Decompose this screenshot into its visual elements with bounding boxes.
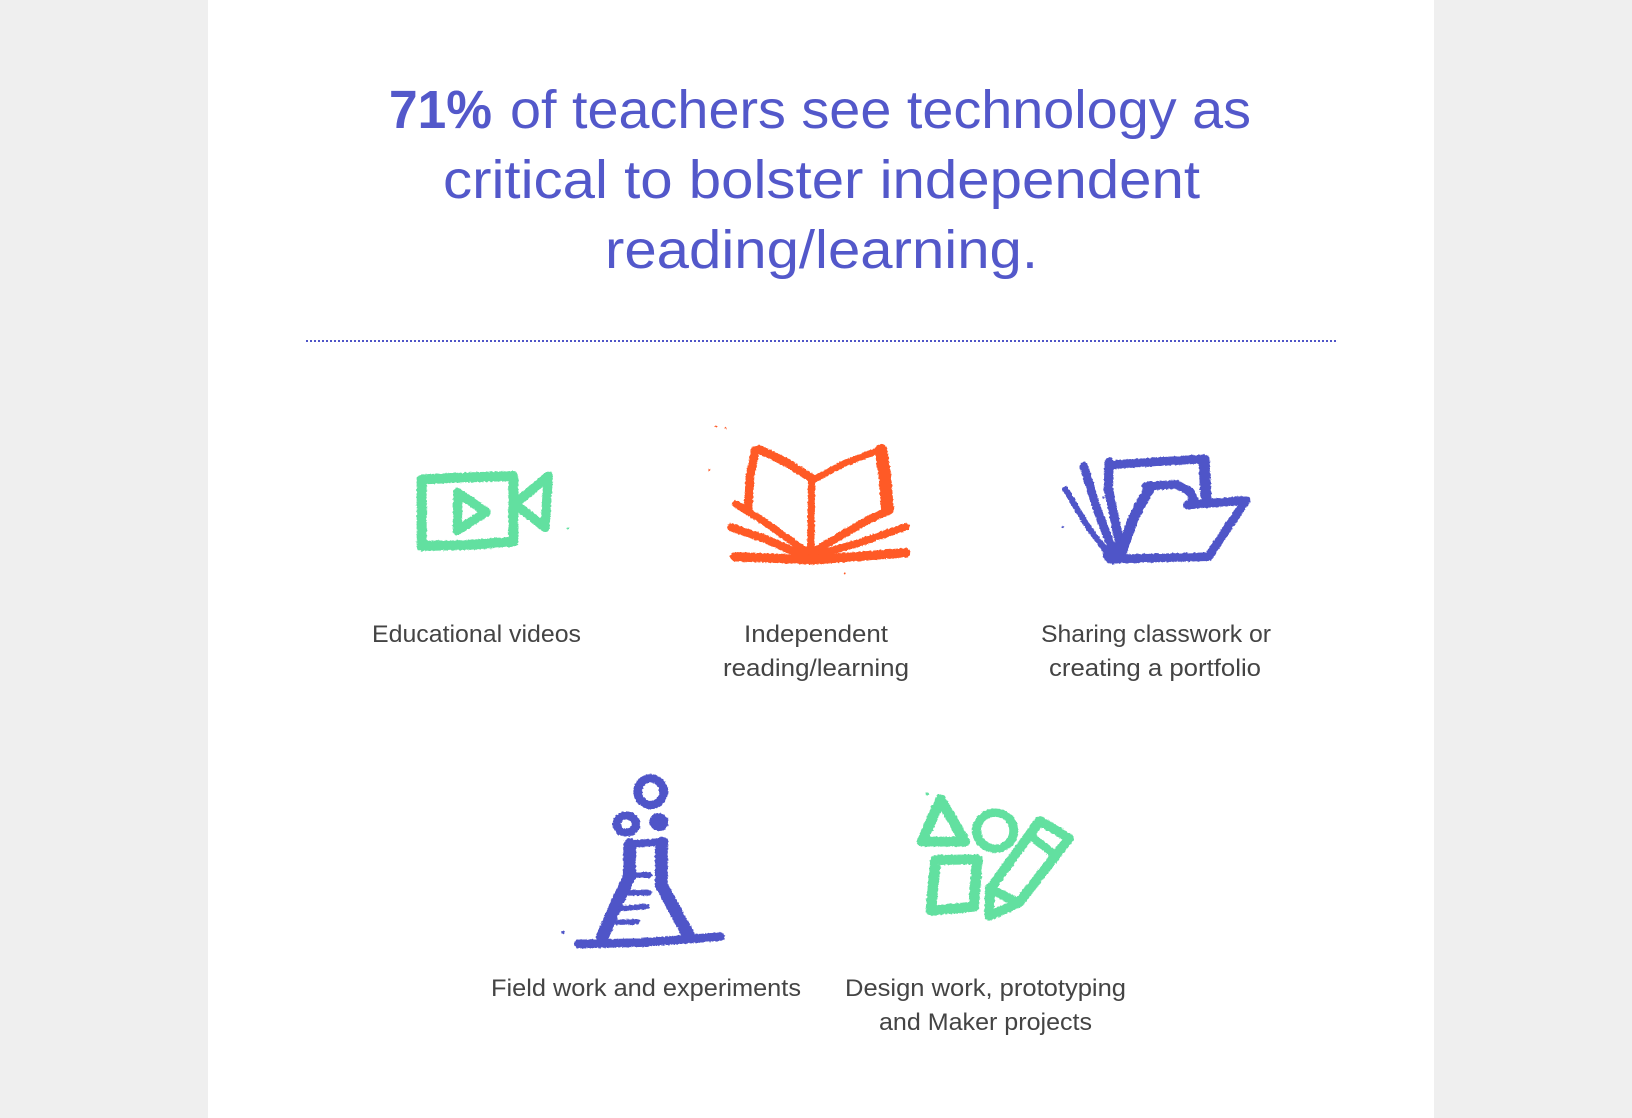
icon: video camera	[422, 476, 568, 546]
label: independent reading/learning	[723, 621, 909, 682]
label: design work: and Maker projects	[879, 1009, 1092, 1036]
label: independent reading/learning: Independent	[744, 621, 888, 648]
label: independent reading/learning: reading/learning	[723, 655, 909, 682]
label: sharing classwork: Sharing classwork or	[1041, 621, 1271, 648]
label: sharing classwork	[1041, 621, 1271, 682]
label: educational videos: Educational videos	[372, 621, 581, 648]
title: 71%	[389, 80, 492, 140]
title: reading/learning.	[605, 220, 1038, 280]
title	[389, 80, 1251, 280]
label: design work: Design work, prototyping	[845, 975, 1126, 1002]
icon: open book	[709, 426, 906, 574]
label: field work: Field work and experiments	[491, 975, 801, 1002]
title: of teachers see technology as	[510, 80, 1251, 140]
icon: folder	[1062, 459, 1246, 559]
label: design work	[845, 975, 1126, 1036]
title: critical to bolster independent	[443, 150, 1200, 210]
icon: shapes and pencil	[922, 793, 1069, 916]
panel: white card	[208, 0, 1434, 1118]
icon: flask with bubbles	[562, 778, 720, 944]
label: sharing classwork: creating a portfolio	[1049, 655, 1261, 682]
